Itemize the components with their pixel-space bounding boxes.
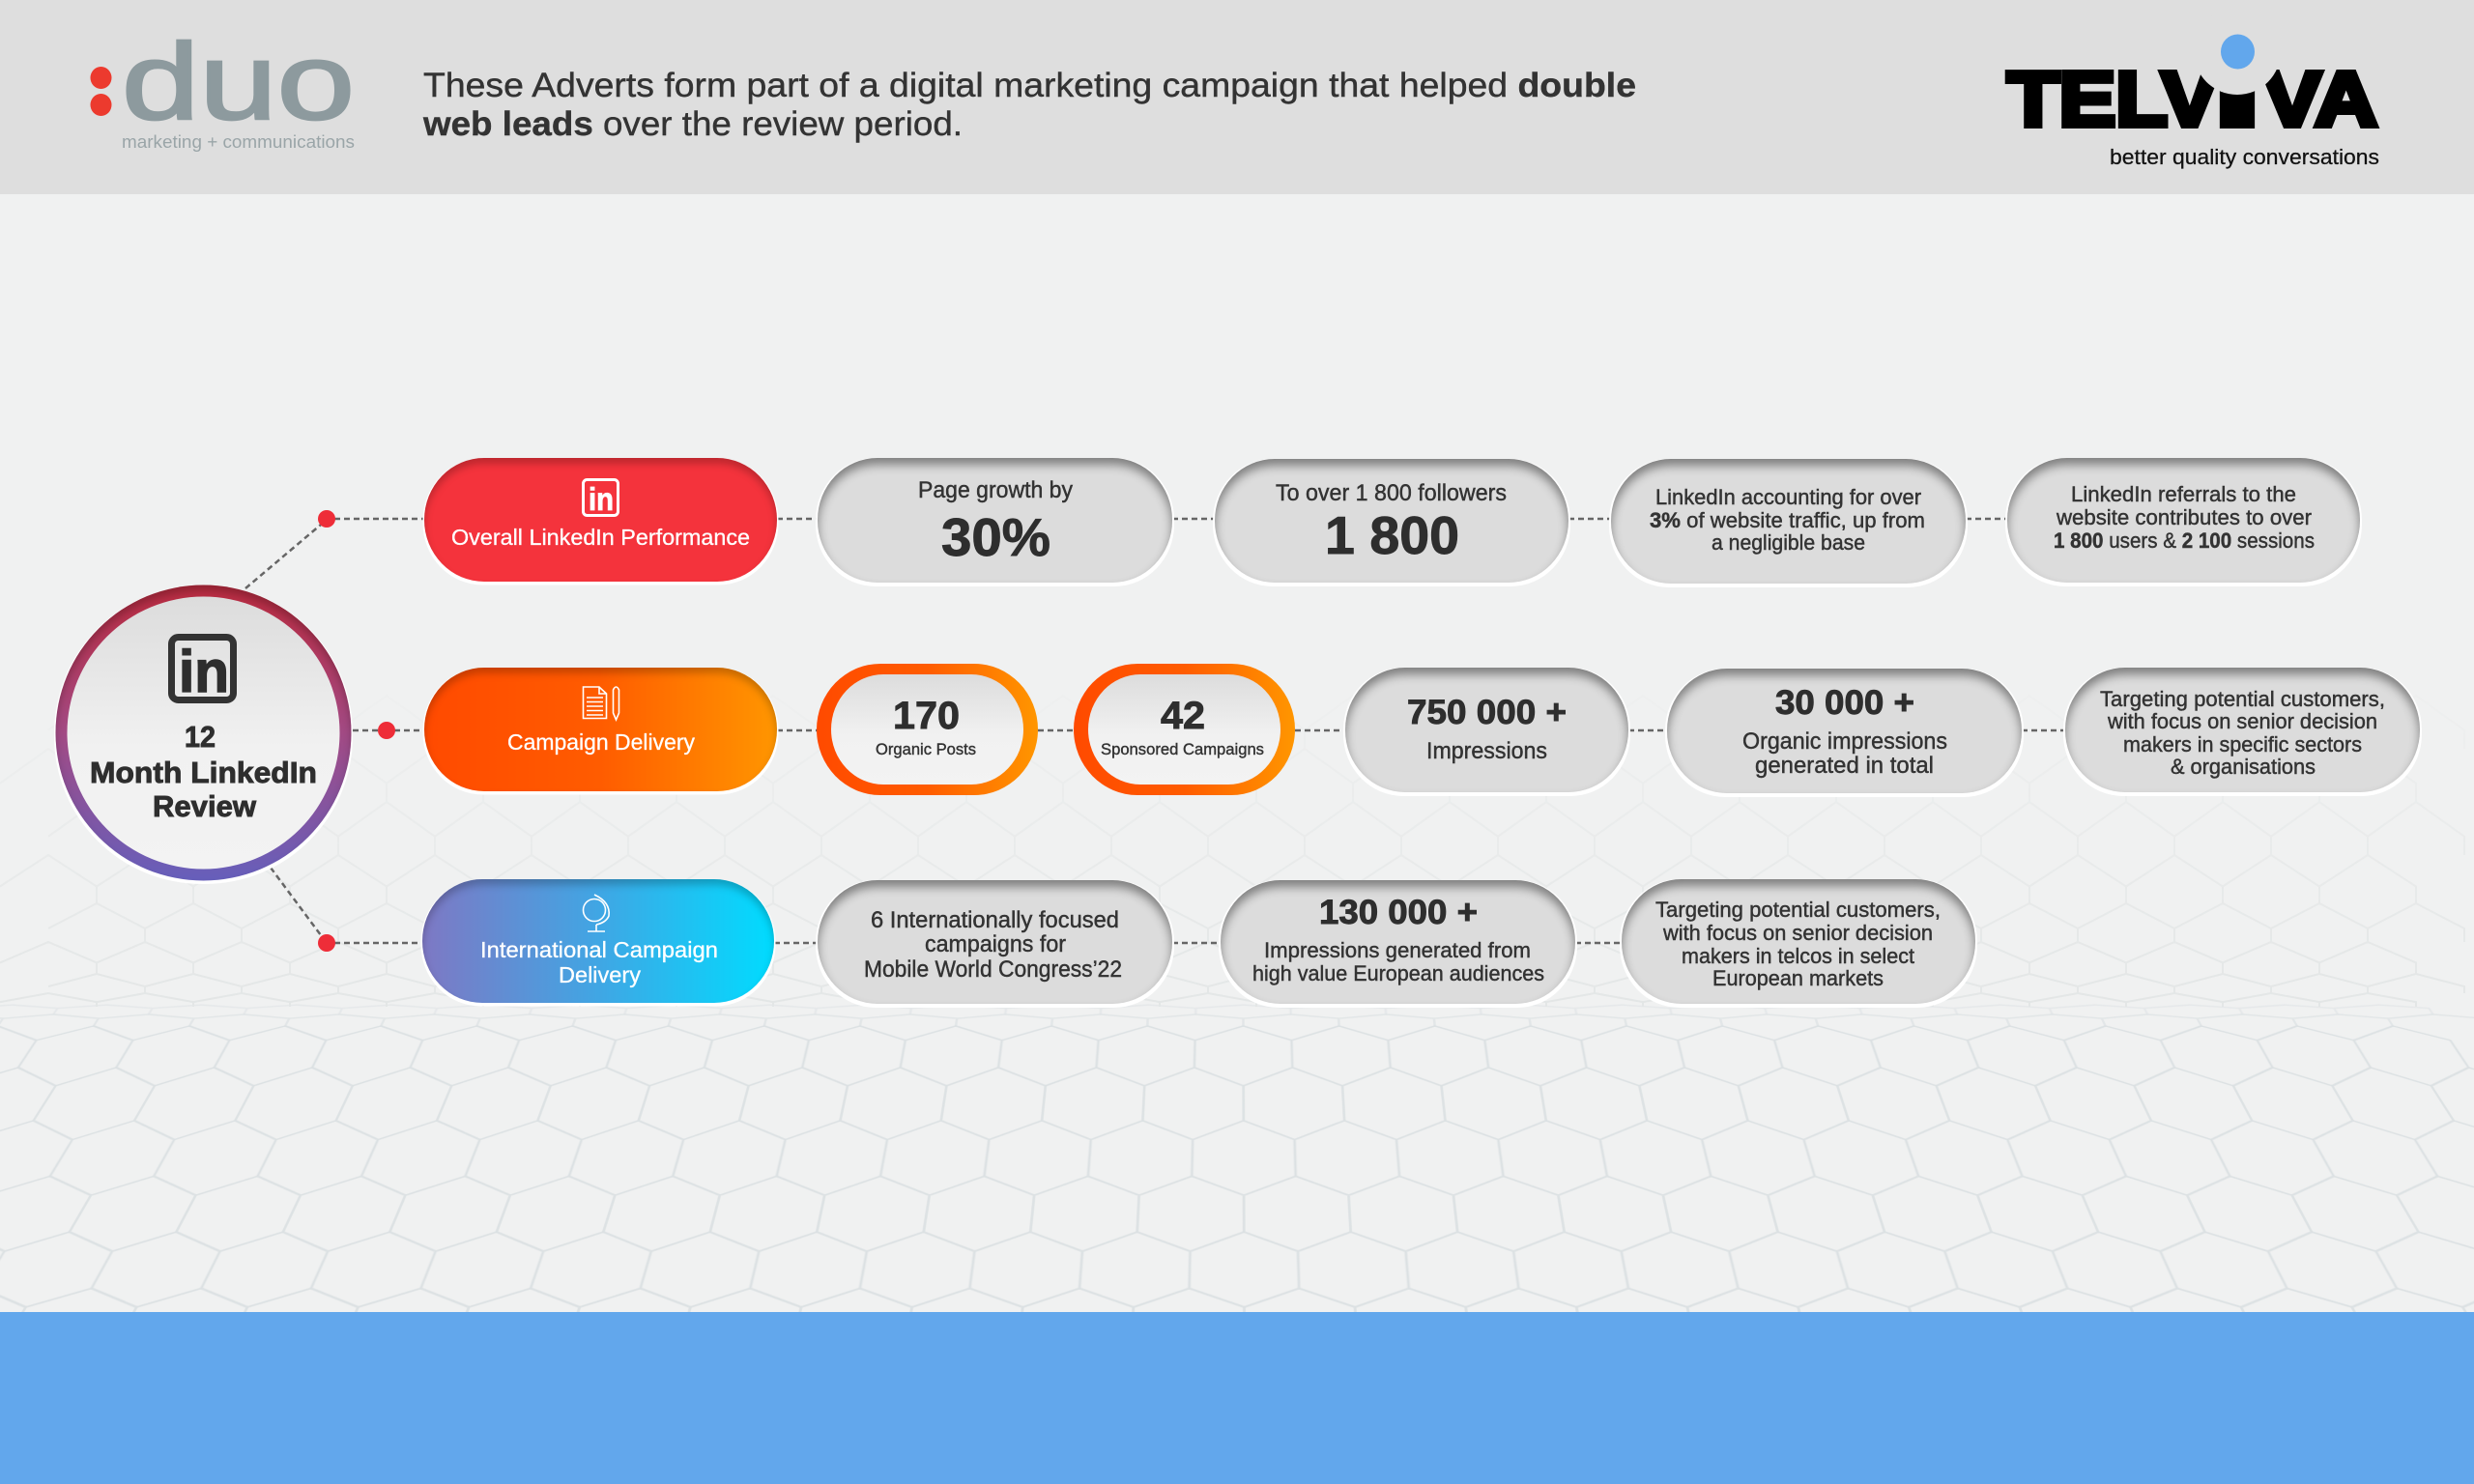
pill shape: [422, 879, 774, 1003]
pill shape: [818, 880, 1172, 1004]
inner panel: [1088, 674, 1280, 785]
line 2: with focus on senior decision: [2107, 709, 2377, 733]
line 1: Impressions generated from: [1264, 938, 1531, 962]
value: 130 000 +: [1319, 894, 1478, 931]
line 4: European markets: [1712, 966, 1884, 990]
pill shape: [424, 458, 777, 582]
stat pill: targeting telcos: [1622, 879, 1975, 1004]
line 1: Organic impressions: [1742, 728, 1947, 755]
icon: LinkedIn: in: [179, 639, 229, 704]
pill shape: [2007, 458, 2360, 583]
label: Campaign Delivery: [507, 729, 695, 755]
wordmark: VA: [2263, 56, 2377, 142]
pill shape: [1667, 669, 2022, 793]
central circle: 12 month LinkedIn review: [56, 585, 352, 881]
strapline: marketing + communications: [122, 132, 355, 152]
label: Overall LinkedIn Performance: [451, 525, 750, 550]
line 3: a negligible base: [1712, 530, 1865, 555]
label line 2: Delivery: [559, 962, 642, 987]
icon: document and pencil: [584, 687, 618, 720]
line 1: LinkedIn accounting for over: [1655, 485, 1921, 509]
value: 30%: [941, 507, 1050, 567]
caption: Sponsored Campaigns: [1101, 740, 1264, 758]
inner disc: [68, 597, 340, 870]
title line 3: Review: [153, 789, 257, 823]
caption: Impressions: [1426, 738, 1547, 764]
stat pill: organic impressions: [1667, 669, 2022, 793]
row 2 heading pill: campaign delivery: [424, 668, 777, 791]
stat pill: impressions: [1345, 668, 1628, 792]
pill shape: [1611, 459, 1966, 584]
stat pill: targeting sectors: [2065, 668, 2420, 792]
header band: [0, 0, 2474, 194]
row 3 heading pill: international campaign delivery: [422, 879, 774, 1003]
line 2: with focus on senior decision: [1662, 921, 1933, 945]
stat pill: Mobile World Congress campaigns: [818, 880, 1172, 1004]
pill shape: [1221, 880, 1575, 1004]
pill shape: [818, 458, 1172, 583]
caption: Page growth by: [918, 477, 1073, 503]
pill shape: [1215, 459, 1568, 583]
caption: To over 1 800 followers: [1276, 480, 1507, 506]
line 1: Targeting potential customers,: [1655, 898, 1941, 922]
pill shape: [1345, 668, 1628, 792]
line 3: Mobile World Congress’22: [864, 956, 1122, 983]
line 3: makers in telcos in select: [1682, 944, 1914, 968]
line 1: Targeting potential customers,: [2100, 687, 2385, 711]
line 2: 3% of website traffic, up from: [1650, 508, 1925, 532]
line 2: generated in total: [1755, 753, 1934, 779]
icon: colon dots: [91, 67, 112, 116]
icon: globe: [584, 895, 609, 931]
title line 1: 12: [185, 720, 216, 754]
ring shape: [817, 664, 1038, 795]
ring shape: [1074, 664, 1295, 795]
wordmark: I: [2215, 56, 2259, 142]
line 2: high value European audiences: [1252, 961, 1544, 985]
line 1: LinkedIn referrals to the: [2071, 482, 2296, 506]
value: 30 000 +: [1775, 684, 1914, 722]
row 1 heading pill: overall LinkedIn performance: [424, 458, 777, 582]
gradient ring: [56, 585, 352, 881]
inner panel: [831, 674, 1023, 785]
line 2: campaigns for: [925, 931, 1066, 957]
stat pill: website traffic: [1611, 459, 1966, 584]
value: 170: [893, 695, 960, 737]
stat ring: organic posts: [817, 664, 1038, 795]
connector dots: [318, 510, 395, 952]
stat pill: European impressions: [1221, 880, 1575, 1004]
line 3: 1 800 users & 2 100 sessions: [2054, 528, 2315, 553]
logo: Telviva: [2007, 8, 2379, 169]
value: 1 800: [1325, 505, 1459, 565]
stat pill: page growth: [818, 458, 1172, 583]
footer band: [0, 1312, 2474, 1484]
logo: duo: [91, 21, 355, 152]
title line 2: Month LinkedIn: [90, 756, 317, 789]
notch around dot: [2194, 8, 2281, 95]
pill shape: [424, 668, 777, 791]
strapline: better quality conversations: [2110, 145, 2379, 169]
icon: LinkedIn: in: [589, 481, 614, 517]
stat pill: referrals: [2007, 458, 2360, 583]
line 2: website contributes to over: [2056, 505, 2312, 529]
stat ring: sponsored campaigns: [1074, 664, 1295, 795]
wordmark: TELV: [2007, 56, 2218, 142]
caption: Organic Posts: [876, 740, 976, 758]
blue dot: [2221, 35, 2255, 70]
headline text: [422, 67, 1636, 143]
headline line 1: These Adverts form part of a digital marketing campaign that helped double: [423, 67, 1636, 104]
headline line 2: web leads over the review period.: [422, 105, 963, 143]
pill shape: [1622, 879, 1975, 1004]
value: 750 000 +: [1407, 694, 1567, 731]
value: 42: [1161, 695, 1205, 737]
wordmark: duo: [122, 21, 355, 142]
line 1: 6 Internationally focused: [871, 907, 1119, 933]
line 3: makers in specific sectors: [2123, 732, 2362, 756]
label line 1: International Campaign: [480, 937, 718, 962]
pill shape: [2065, 668, 2420, 792]
line 4: & organisations: [2171, 755, 2316, 779]
connector lines: [245, 519, 2065, 943]
stat pill: followers: [1215, 459, 1568, 583]
